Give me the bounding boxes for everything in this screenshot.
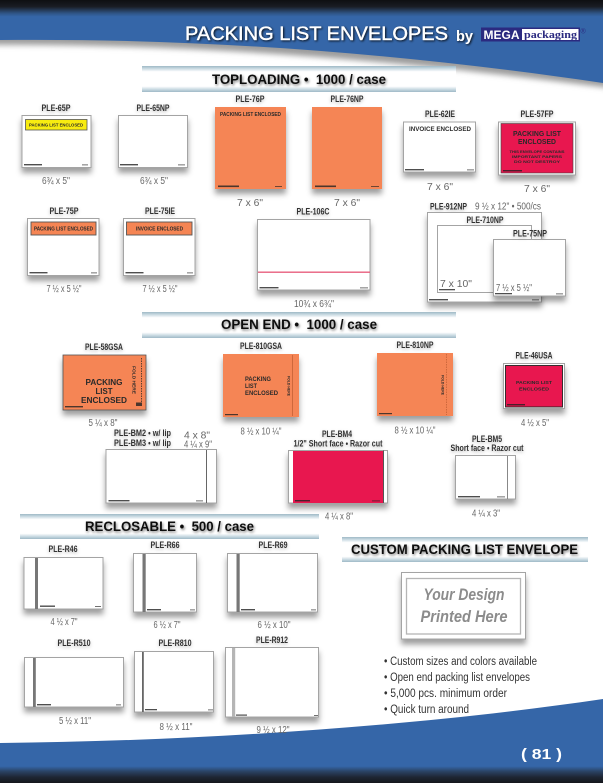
product: PLE-58GSA bbox=[63, 342, 146, 429]
custom envelope sample bbox=[402, 572, 526, 639]
product: PLE-75P: PACKING LIST ENCLOSED bbox=[34, 226, 93, 232]
product: PLE-62IE: PLE-62IE bbox=[425, 109, 455, 120]
product: PLE-58GSA: LIST bbox=[96, 387, 113, 396]
logo: Mega Packaging: ® bbox=[580, 28, 586, 36]
product: PLE-65NP bbox=[118, 103, 188, 187]
product: PLE-76P: PACKING LIST ENCLOSED bbox=[220, 112, 281, 118]
product: PLE-75IE: 7 ½ x 5 ½" bbox=[142, 284, 178, 295]
product: PLE-R810 bbox=[134, 638, 214, 733]
product: PLE-76NP: PLE-76NP bbox=[330, 94, 364, 105]
product: PLE-R510: 5 ½ x 11" bbox=[59, 716, 91, 727]
product: PLE-106C bbox=[258, 206, 370, 310]
logo: Mega Packaging bbox=[481, 28, 586, 42]
heading: custom packing list envelope: CUSTOM PACKING LIST ENVELOPE bbox=[351, 541, 578, 557]
product: PLE-57FP bbox=[498, 109, 576, 195]
product: PLE-R810: PLE-R810 bbox=[158, 638, 192, 649]
product: PLE-BM4 bbox=[288, 429, 388, 522]
product: PLE-R69 bbox=[228, 540, 318, 631]
product: PLE-BM5: PLE-BM5 bbox=[472, 434, 502, 445]
product: PLE-810NP: FOLD HERE bbox=[440, 375, 444, 396]
product: PLE-46USA: ENCLOSED bbox=[519, 386, 550, 392]
product: PLE-R66 bbox=[134, 540, 196, 631]
product: PLE-75P: PLE-75P bbox=[50, 206, 79, 217]
heading: open end bbox=[142, 312, 456, 338]
product: PLE-106C: PLE-106C bbox=[296, 206, 330, 218]
custom envelope sample: Printed Here bbox=[420, 608, 508, 626]
product: PLE-R912: 9 ½ x 12" bbox=[256, 725, 290, 736]
page number: ( 81 ) bbox=[521, 746, 562, 763]
product: PLE-58GSA: PACKING bbox=[86, 378, 122, 387]
product: PLE-58GSA: FOLD HERE bbox=[132, 366, 136, 394]
product: PLE-76P: 7 x 6" bbox=[237, 198, 263, 209]
product: PLE-57FP: 7 x 6" bbox=[524, 184, 550, 195]
feature list: • Quick turn around bbox=[384, 704, 469, 716]
product: PLE-810GSA bbox=[223, 341, 299, 438]
product group: PLE-912NP, PLE-710NP, PLE-75NP: PLE-912NP bbox=[430, 202, 467, 212]
product: PLE-75P: 7 ½ x 5 ½" bbox=[46, 284, 82, 295]
feature list bbox=[384, 656, 537, 716]
product: PLE-R510 bbox=[24, 638, 124, 727]
product: PLE-BM2 and PLE-BM3: PLE-BM2 • w/ lip bbox=[114, 428, 171, 439]
product: PLE-810GSA: FOLD HERE bbox=[286, 376, 290, 397]
product: PLE-57FP: IMPORTANT PAPERS bbox=[512, 155, 563, 159]
product: PLE-58GSA: PLE-58GSA bbox=[85, 342, 123, 353]
product: PLE-810GSA: PLE-810GSA bbox=[240, 341, 282, 352]
product: PLE-57FP: ENCLOSED bbox=[518, 139, 556, 146]
feature list: • Custom sizes and colors available bbox=[384, 656, 537, 668]
product: PLE-BM2 and PLE-BM3: 4 ¼ x 9" bbox=[184, 438, 212, 450]
logo: Mega Packaging: MEGA bbox=[484, 28, 520, 42]
product: PLE-58GSA: 5 ¼ x 8" bbox=[88, 417, 118, 429]
product group: PLE-912NP, PLE-710NP, PLE-75NP: 7 x 10" bbox=[440, 279, 472, 290]
product: PLE-R46: PLE-R46 bbox=[48, 544, 78, 555]
product: PLE-76P bbox=[215, 94, 286, 209]
product: PLE-R810: 8 ½ x 11" bbox=[160, 722, 193, 733]
product group: PLE-912NP, PLE-710NP, PLE-75NP: PLE-710NP bbox=[466, 215, 504, 226]
product: PLE-65P: PACKING LIST ENCLOSED bbox=[29, 122, 84, 128]
product: PLE-57FP: THIS ENVELOPE CONTAINS bbox=[510, 150, 565, 154]
product: PLE-BM4: 1/2" Short face • Razor cut bbox=[294, 438, 383, 450]
header swoosh bbox=[0, 0, 603, 92]
product: PLE-R912 bbox=[226, 635, 318, 736]
product: PLE-76NP bbox=[312, 94, 382, 209]
product: PLE-BM2 and PLE-BM3: 4 x 8" bbox=[184, 430, 210, 442]
product group: PLE-912NP, PLE-710NP, PLE-75NP: PLE-75NP bbox=[513, 228, 547, 240]
heading: reclosable bbox=[20, 514, 319, 539]
product: PLE-65P bbox=[22, 103, 91, 187]
feature list: • Open end packing list envelopes bbox=[384, 672, 530, 684]
product: PLE-76P: PLE-76P bbox=[236, 94, 265, 105]
product: PLE-810GSA: 8 ½ x 10 ¼" bbox=[240, 426, 282, 438]
heading: custom packing list envelope bbox=[342, 537, 588, 562]
product: PLE-BM2 and PLE-BM3 bbox=[106, 428, 216, 503]
logo: Mega Packaging: packaging bbox=[524, 30, 578, 41]
product: PLE-75IE: PLE-75IE bbox=[145, 206, 175, 217]
product: PLE-810NP bbox=[377, 340, 453, 436]
product: PLE-46USA: PACKING LIST bbox=[516, 380, 552, 386]
title: PACKING LIST ENVELOPES bbox=[185, 24, 448, 45]
product: PLE-46USA: PLE-46USA bbox=[516, 350, 553, 362]
product group: PLE-912NP, PLE-710NP, PLE-75NP bbox=[428, 202, 566, 302]
product: PLE-BM2 and PLE-BM3: PLE-BM3 • w/ lip bbox=[114, 438, 171, 449]
product: PLE-R69: PLE-R69 bbox=[258, 540, 288, 551]
product: PLE-810GSA: ENCLOSED bbox=[245, 391, 279, 397]
heading: toploading: TOPLOADING • 1000 / case bbox=[212, 71, 386, 87]
product: PLE-R46 bbox=[24, 544, 103, 628]
product: PLE-106C: 10¾ x 6¾" bbox=[294, 299, 334, 310]
product: PLE-62IE: 7 x 6" bbox=[427, 182, 453, 193]
product: PLE-62IE: INVOICE ENCLOSED bbox=[409, 126, 472, 133]
product: PLE-R66: 6 ½ x 7" bbox=[154, 620, 181, 631]
product: PLE-62IE bbox=[404, 109, 476, 193]
heading: open end: OPEN END • 1000 / case bbox=[221, 316, 377, 332]
product: PLE-75IE bbox=[124, 206, 195, 295]
product: PLE-R69: 6 ½ x 10" bbox=[258, 620, 291, 631]
product: PLE-65NP: PLE-65NP bbox=[136, 103, 170, 114]
product: PLE-75IE: INVOICE ENCLOSED bbox=[136, 226, 183, 232]
product: PLE-57FP: DO NOT DESTROY bbox=[514, 160, 561, 164]
heading: reclosable: RECLOSABLE • 500 / case bbox=[85, 518, 254, 534]
feature list: • 5,000 pcs. minimum order bbox=[384, 688, 507, 700]
product: PLE-BM5 bbox=[450, 434, 524, 520]
product: PLE-75P bbox=[28, 206, 99, 295]
product: PLE-BM5: Short face • Razor cut bbox=[450, 443, 524, 454]
title: by bbox=[456, 28, 474, 45]
product: PLE-810GSA: LIST bbox=[245, 384, 257, 390]
product: PLE-57FP: PACKING LIST bbox=[513, 131, 562, 138]
product group: PLE-912NP, PLE-710NP, PLE-75NP: 9 ½ x 12" • 500/cs bbox=[475, 202, 541, 212]
product: PLE-R912: PLE-R912 bbox=[256, 635, 288, 646]
product: PLE-BM5: 4 ¼ x 3" bbox=[472, 508, 500, 520]
product: PLE-76NP: 7 x 6" bbox=[334, 198, 360, 209]
product: PLE-810NP: 8 ½ x 10 ¼" bbox=[394, 424, 436, 436]
custom envelope sample: Your Design bbox=[424, 586, 504, 604]
heading: toploading bbox=[142, 66, 456, 92]
product: PLE-58GSA: ENCLOSED bbox=[81, 396, 127, 405]
product: PLE-57FP: PLE-57FP bbox=[520, 109, 554, 120]
product: PLE-BM4: PLE-BM4 bbox=[322, 429, 352, 440]
product: PLE-46USA bbox=[504, 350, 564, 429]
product: PLE-R66: PLE-R66 bbox=[150, 540, 180, 551]
product: PLE-65P: 6¾ x 5" bbox=[42, 176, 70, 187]
product: PLE-65NP: 6¾ x 5" bbox=[140, 176, 168, 187]
product: PLE-BM4: 4 ¼ x 8" bbox=[325, 510, 353, 522]
product group: PLE-912NP, PLE-710NP, PLE-75NP: 7 ½ x 5 ½" bbox=[496, 283, 532, 294]
product: PLE-810NP: PLE-810NP bbox=[396, 340, 434, 351]
footer swoosh bbox=[0, 699, 603, 783]
product: PLE-810GSA: PACKING bbox=[245, 377, 271, 383]
product: PLE-46USA: 4 ½ x 5" bbox=[521, 418, 549, 429]
product: PLE-R510: PLE-R510 bbox=[58, 638, 90, 649]
product: PLE-R46: 4 ½ x 7" bbox=[50, 617, 78, 628]
product: PLE-65P: PLE-65P bbox=[42, 103, 71, 114]
